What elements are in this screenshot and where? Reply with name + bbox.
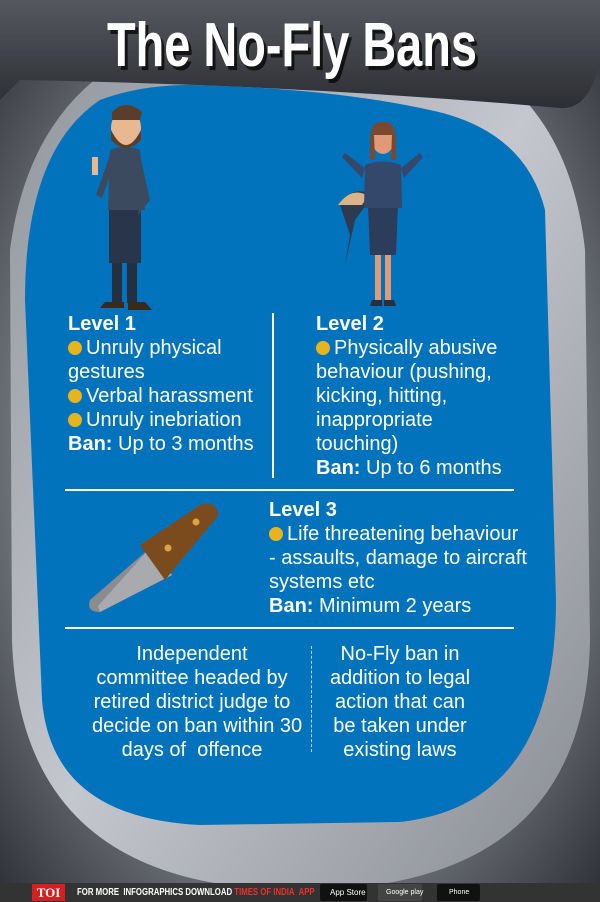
panel: level 1: Ban: Up to 3 months bbox=[68, 433, 254, 455]
panel: level 3: Level 3 bbox=[269, 499, 337, 521]
footer: TOI logo: TOI bbox=[37, 885, 60, 900]
text: committee: decide on ban within 30 bbox=[92, 715, 302, 737]
text: legal action: addition to legal bbox=[330, 667, 470, 689]
divider: vertical bbox=[272, 313, 274, 478]
panel: level 1: Level 1 bbox=[68, 313, 136, 335]
panel: level 2: behaviour (pushing, bbox=[316, 361, 492, 383]
panel: level 1: Unruly physical bbox=[86, 337, 222, 359]
text: legal action: existing laws bbox=[343, 739, 457, 761]
text: legal action bbox=[330, 643, 470, 761]
panel: level 1: gestures bbox=[68, 361, 145, 383]
footer: store badges: Google play bbox=[386, 889, 423, 896]
text: committee bbox=[92, 643, 302, 761]
panel: level 2: Level 2 bbox=[316, 313, 384, 335]
panel: level 3 bbox=[269, 499, 527, 617]
icon: knife bbox=[89, 504, 218, 612]
footer: promo text: FOR MORE INFOGRAPHICS DOWNLOAD TIMES OF INDIA APP bbox=[77, 887, 315, 898]
icon: man figure bbox=[92, 105, 152, 310]
title: The No-Fly Bans bbox=[107, 11, 477, 80]
panel: level 3: Life threatening behaviour bbox=[287, 523, 518, 545]
text: legal action: No-Fly ban in bbox=[341, 643, 459, 665]
footer: store badges: Phone bbox=[449, 889, 469, 896]
footer: store badges bbox=[320, 884, 480, 901]
footer bar bbox=[0, 883, 600, 902]
text: legal action: be taken under bbox=[333, 715, 467, 737]
text: committee: days of offence bbox=[122, 739, 262, 761]
title: The No-Fly Bans bbox=[110, 15, 480, 84]
panel: level 2: touching) bbox=[316, 433, 398, 455]
panel: level 2: kicking, hitting, bbox=[316, 385, 447, 407]
panel: level 3: - assaults, damage to aircraft bbox=[269, 547, 527, 569]
panel: level 2: Physically abusive bbox=[334, 337, 497, 359]
panel: level 2: inappropriate bbox=[316, 409, 433, 431]
panel: level 3: systems etc bbox=[269, 571, 375, 593]
panel: level 2: Ban: Up to 6 months bbox=[316, 457, 502, 479]
panel: level 3: Ban: Minimum 2 years bbox=[269, 595, 471, 617]
divider: dashed bbox=[311, 646, 312, 752]
footer: TOI logo bbox=[32, 884, 65, 901]
panel: level 1: Verbal harassment bbox=[86, 385, 253, 407]
text: legal action: action that can bbox=[335, 691, 465, 713]
text: committee: retired district judge to bbox=[94, 691, 290, 713]
panel: level 2 bbox=[316, 313, 502, 479]
panel: level 1: Unruly inebriation bbox=[86, 409, 242, 431]
text: committee: Independent bbox=[136, 643, 248, 665]
panel: level 1 bbox=[68, 313, 254, 455]
icon: woman figure with hand bbox=[338, 122, 423, 306]
footer: store badges: App Store bbox=[330, 888, 366, 897]
text: committee: committee headed by bbox=[96, 667, 288, 689]
